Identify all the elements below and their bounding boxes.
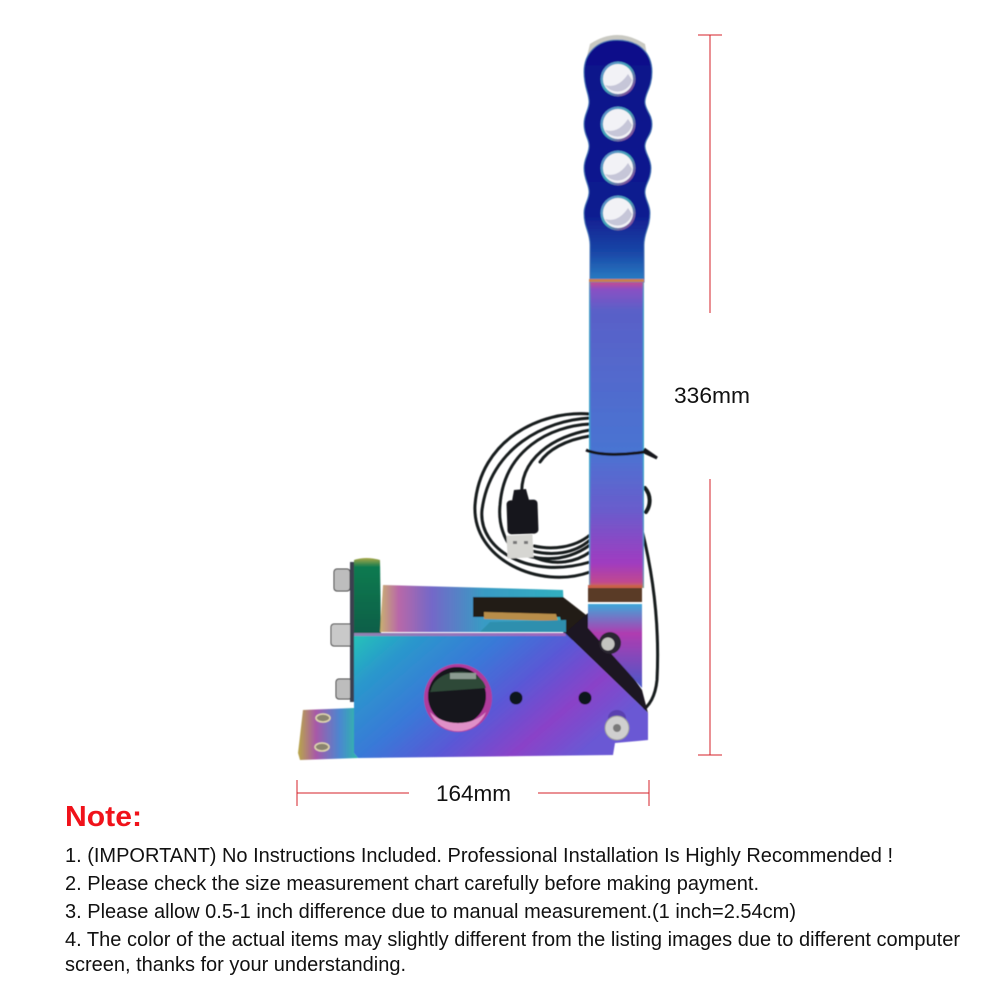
back plate edge — [350, 562, 355, 702]
lever lower segment — [588, 604, 642, 688]
note heading: Note: — [65, 801, 142, 833]
height label: 336mm — [674, 383, 750, 408]
slot in top panel — [473, 597, 600, 640]
note text block: 3. Please allow 0.5-1 inch difference due to manual measurement.(1 inch=2.54cm) — [65, 901, 796, 923]
side bolt — [605, 710, 629, 740]
shaft dark band — [588, 585, 642, 602]
note text block — [65, 845, 960, 976]
USB cable — [475, 414, 658, 712]
cable tie — [586, 449, 657, 458]
product photo: neon handbrake — [298, 35, 658, 760]
note text block: 4. The color of the actual items may slightly different from the listing images due to different computer — [65, 929, 960, 951]
height dimension line — [698, 35, 722, 755]
top panel — [380, 585, 565, 632]
pivot bolt — [599, 632, 621, 654]
width label: 164mm — [436, 781, 511, 806]
note text block: screen, thanks for your understanding. — [65, 954, 406, 976]
handle grip — [584, 35, 652, 282]
note text block: 2. Please check the size measurement chart carefully before making payment. — [65, 873, 759, 895]
lever shaft — [589, 280, 644, 588]
big round window — [424, 664, 492, 732]
USB plug — [506, 489, 539, 559]
side panel — [354, 633, 648, 758]
mounting flange — [298, 708, 358, 760]
small holes — [510, 692, 522, 704]
bolts — [331, 569, 353, 699]
note text block: 1. (IMPORTANT) No Instructions Included. Professional Installation Is Highly Recommended ! — [65, 845, 893, 867]
handle holes — [600, 62, 636, 230]
dark inner triangle — [565, 613, 648, 713]
flange holes — [315, 714, 330, 751]
upright green plate — [354, 558, 381, 633]
width dimension line — [297, 780, 649, 806]
